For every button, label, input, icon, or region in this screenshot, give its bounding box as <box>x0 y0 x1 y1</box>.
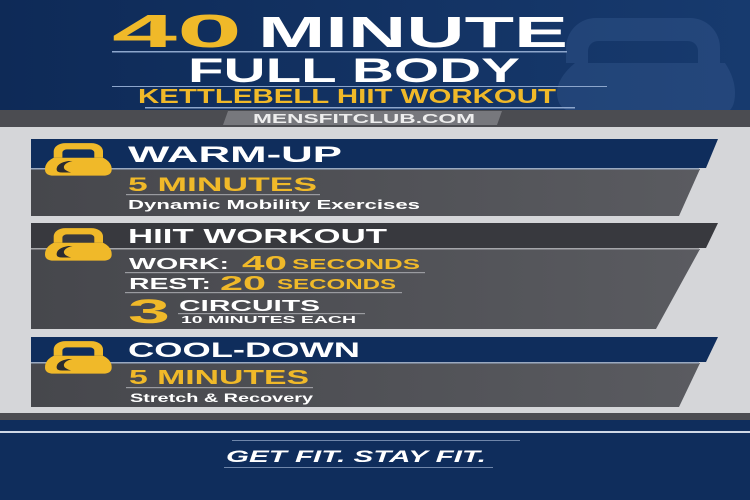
title: 40 <box>112 5 242 57</box>
panel: cool-down: 5 MINUTES <box>129 367 309 389</box>
panel: hiit workout: 10 MINUTES EACH <box>181 315 356 326</box>
footer <box>0 413 750 500</box>
panel: warm-up: WARM-UP <box>128 142 342 167</box>
icon: kettlebell warm-up <box>45 143 112 176</box>
panel: cool-down <box>31 337 718 407</box>
panel: hiit workout <box>31 223 718 331</box>
panel: hiit workout: 40 <box>242 253 287 275</box>
panel: hiit workout: CIRCUITS <box>179 298 321 315</box>
panel: warm-up: Dynamic Mobility Exercises <box>128 197 420 212</box>
panel: hiit workout: SECONDS <box>277 276 396 293</box>
website tag <box>223 111 502 126</box>
gray band <box>0 110 750 127</box>
title: MINUTE <box>258 8 568 57</box>
panel: hiit workout: WORK: <box>129 256 229 273</box>
tagline: GET FIT. STAY FIT. <box>226 447 486 466</box>
panel: hiit workout: HIIT WORKOUT <box>128 226 387 248</box>
panel: hiit workout: 20 <box>220 273 266 295</box>
panel: warm-up: 5 MINUTES <box>128 175 317 196</box>
panel: cool-down: COOL-DOWN <box>128 339 360 362</box>
panel: hiit workout: REST: <box>129 276 211 293</box>
title <box>112 5 607 108</box>
panel: hiit workout: SECONDS <box>292 256 420 273</box>
panel: hiit workout: 3 <box>128 293 170 331</box>
icon: kettlebell cool-down <box>45 341 112 374</box>
title: FULL BODY <box>188 52 521 90</box>
icon: faded kettlebell <box>557 18 735 113</box>
panel: cool-down: Stretch & Recovery <box>130 391 314 405</box>
panel: warm-up <box>31 139 718 216</box>
title: KETTLEBELL HIIT WORKOUT <box>138 86 556 108</box>
header background <box>0 0 750 112</box>
website tag: MENSFITCLUB.COM <box>253 111 475 126</box>
icon: kettlebell hiit <box>45 228 112 261</box>
